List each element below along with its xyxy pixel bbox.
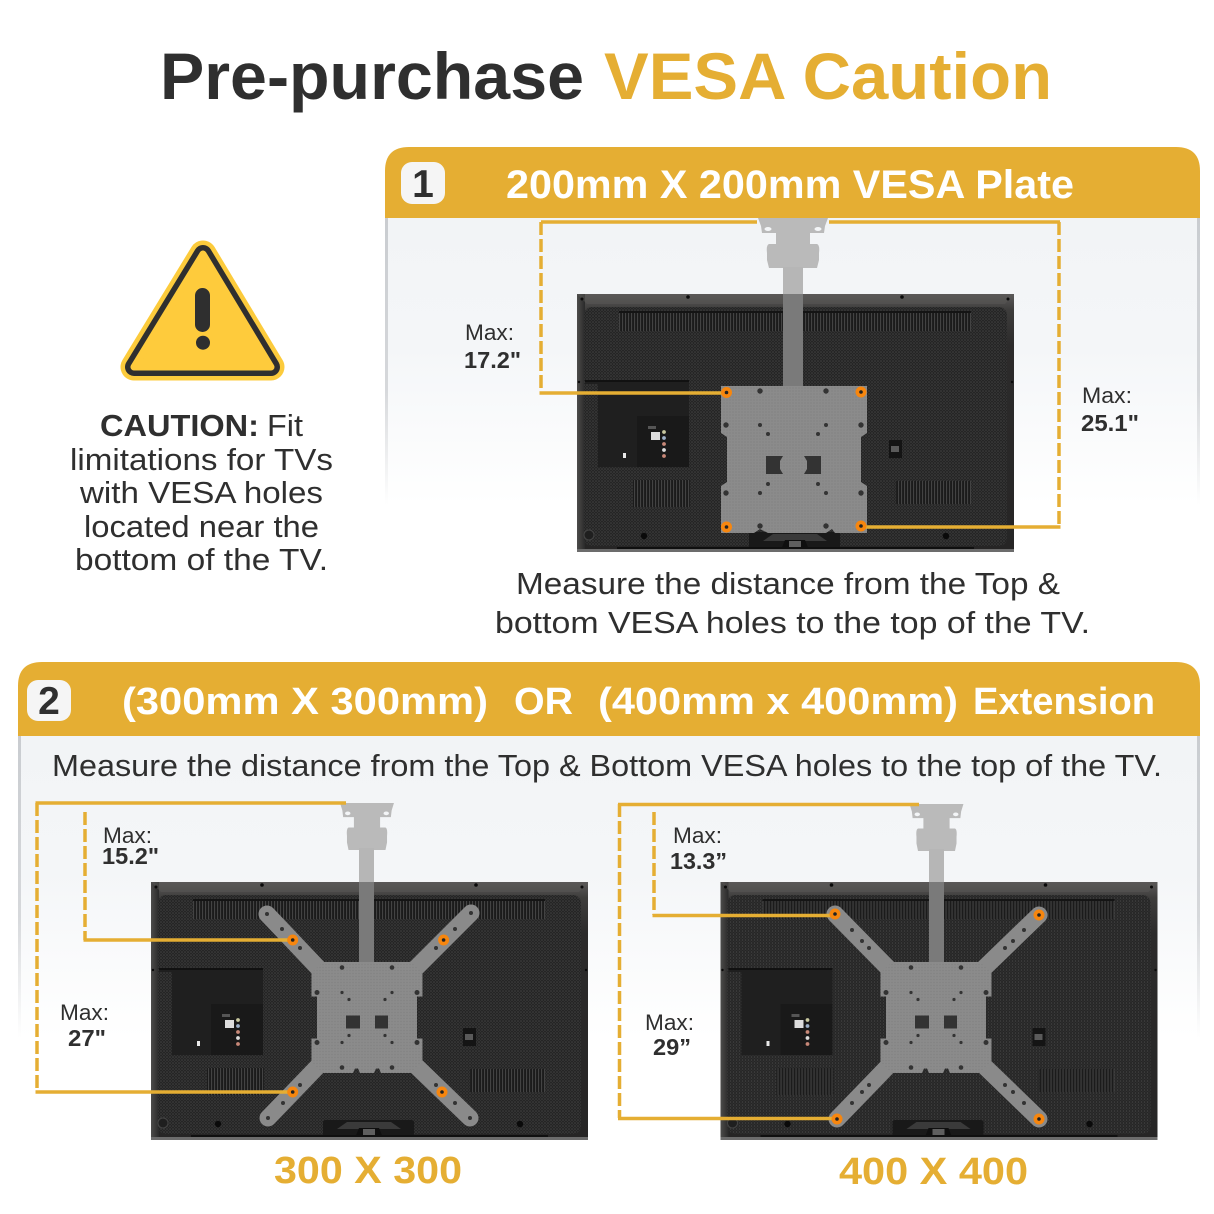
panel 2 header: Extension: [973, 681, 1155, 723]
diagram: 300 x 300: [36, 803, 588, 1192]
panel 2 header: (300mm X 300mm): [122, 681, 488, 723]
caution text: located near the: [84, 509, 319, 544]
label: max 27: [60, 1000, 109, 1051]
label: max 29: Max:: [645, 1010, 694, 1035]
caution text: Fit: [267, 408, 303, 443]
label: max 17.2: 17.2": [464, 347, 521, 373]
caution text: CAUTION:: [100, 408, 259, 443]
panel 1 instruction: [495, 566, 1090, 640]
label: max 15.2: [102, 823, 159, 869]
panel 2 header: 2: [38, 680, 60, 723]
label: max 13.3: 13.3”: [670, 848, 727, 874]
extension arms: [267, 913, 471, 1118]
caption 400 x 400: 400 X 400: [839, 1151, 1028, 1193]
label: max 13.3: [670, 823, 727, 874]
highlighted VESA holes: [721, 386, 866, 532]
panel 1 instruction: Measure the distance from the Top &: [516, 566, 1060, 601]
VESA plate: [721, 386, 867, 533]
label: max 25.1: Max:: [1082, 383, 1132, 408]
diagram: 400 x 400: [618, 804, 1158, 1193]
panel: 200mm VESA plate: [385, 147, 1200, 640]
title: Pre-purchase: [160, 39, 584, 113]
label: max 13.3: Max:: [673, 823, 722, 848]
label: max 15.2: 15.2": [102, 843, 159, 869]
TV back with 200mm plate: [577, 218, 1014, 552]
label: max 27: Max:: [60, 1000, 109, 1025]
panel 2 header: [18, 662, 1200, 736]
label: max 15.2: Max:: [103, 823, 152, 848]
panel: 300mm or 400mm extension: [18, 662, 1200, 1193]
label: max 17.2: [464, 320, 521, 373]
caution text: bottom of the TV.: [75, 542, 328, 577]
panel 1 header: 200mm X 200mm VESA Plate: [506, 163, 1074, 207]
caution text: with VESA holes: [79, 475, 323, 510]
label: max 25.1: [1081, 383, 1139, 436]
measurement lines: [36, 803, 346, 1092]
ceiling mount: [910, 804, 963, 851]
measurement lines: [618, 804, 919, 1118]
label: max 29: [645, 1010, 694, 1060]
caution notice: [70, 254, 333, 577]
label: max 29: 29”: [653, 1034, 691, 1060]
panel 1 header: [385, 147, 1200, 218]
measurement lines: [540, 222, 1060, 527]
title: [160, 39, 1052, 113]
icon: warning triangle: [134, 254, 271, 367]
caution text: limitations for TVs: [70, 442, 333, 477]
ceiling mount: [758, 218, 828, 268]
caution text: [70, 408, 333, 577]
label: max 17.2: Max:: [465, 320, 514, 345]
panel 1 instruction: bottom VESA holes to the top of the TV.: [495, 605, 1090, 640]
highlighted VESA holes: [287, 934, 449, 1098]
label: max 27: 27": [68, 1025, 106, 1051]
label: max 25.1: 25.1": [1081, 410, 1139, 436]
panel 2 header: OR: [514, 681, 573, 723]
panel 2 instruction: Measure the distance from the Top & Bottom VESA holes to the top of the TV.: [52, 748, 1162, 783]
title: VESA Caution: [604, 39, 1052, 113]
extension arms: [835, 914, 1039, 1119]
highlighted VESA holes: [830, 908, 1044, 1124]
panel 2 header: (400mm x 400mm): [598, 681, 958, 723]
caption 300 x 300: 300 X 300: [274, 1150, 462, 1192]
panel 1 header: 1: [412, 163, 434, 206]
ceiling mount: [340, 803, 394, 850]
